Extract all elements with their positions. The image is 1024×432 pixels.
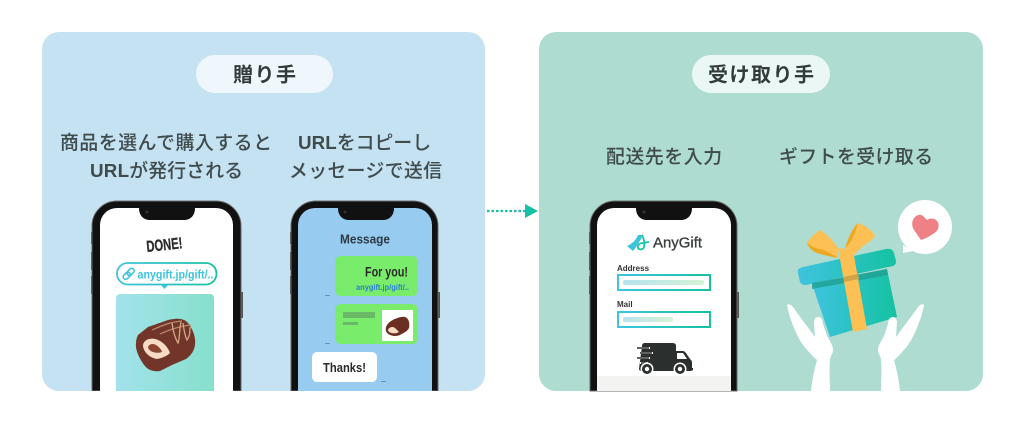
text: copy and send URL	[289, 132, 442, 181]
text: copy and send URL: URLをコピーし	[298, 132, 431, 153]
panel: receiver	[539, 32, 983, 391]
phone: address form	[589, 201, 739, 391]
arrow	[487, 204, 538, 218]
pill heading: sender: 贈り手	[233, 64, 296, 86]
icon: delivery truck	[636, 343, 693, 376]
pill heading: receiver: 受け取り手	[708, 64, 814, 86]
logo: AnyGift	[627, 234, 703, 252]
phone: message screen	[290, 201, 440, 391]
bubble: For you!: For you!	[365, 264, 408, 280]
bubble: For you!: anygift.jp/gift/..	[356, 283, 409, 292]
text: choose and purchase: URLが発行される	[90, 160, 243, 181]
form: address field	[617, 264, 710, 290]
form: mail field	[617, 300, 710, 327]
pill heading: receiver	[692, 55, 830, 93]
text: DONE!: DONE!	[146, 235, 183, 256]
product card	[116, 294, 214, 394]
text: copy and send URL: メッセージで送信	[289, 160, 442, 181]
form: mail field: Mail	[617, 300, 633, 309]
speech bubble with heart	[898, 200, 952, 254]
panel: sender	[42, 32, 485, 394]
gift bow	[807, 223, 875, 258]
bubble: Thanks!: Thanks!	[323, 360, 366, 375]
pill heading: sender	[196, 55, 333, 93]
text: enter address: 配送先を入力	[606, 146, 722, 167]
icon: roll cake	[136, 319, 195, 371]
bubble: Thanks!	[312, 352, 377, 382]
URL bubble: anygift.jp/gift/..	[138, 270, 214, 282]
illustration: gift box and hands	[787, 200, 952, 391]
text: choose and purchase	[60, 132, 272, 181]
bubble: For you!	[335, 256, 418, 296]
text: receive gift: ギフトを受け取る	[779, 146, 933, 167]
URL bubble	[117, 263, 216, 289]
text: Message: Message	[340, 232, 390, 246]
hands	[787, 304, 924, 391]
phone: done screen	[91, 201, 243, 394]
gift box	[798, 248, 897, 337]
form: address field: Address	[617, 264, 650, 273]
logo: AnyGift: AnyGift	[653, 234, 703, 252]
bubble: gift card	[335, 304, 418, 344]
text: choose and purchase: 商品を選んで購入すると	[60, 132, 272, 153]
